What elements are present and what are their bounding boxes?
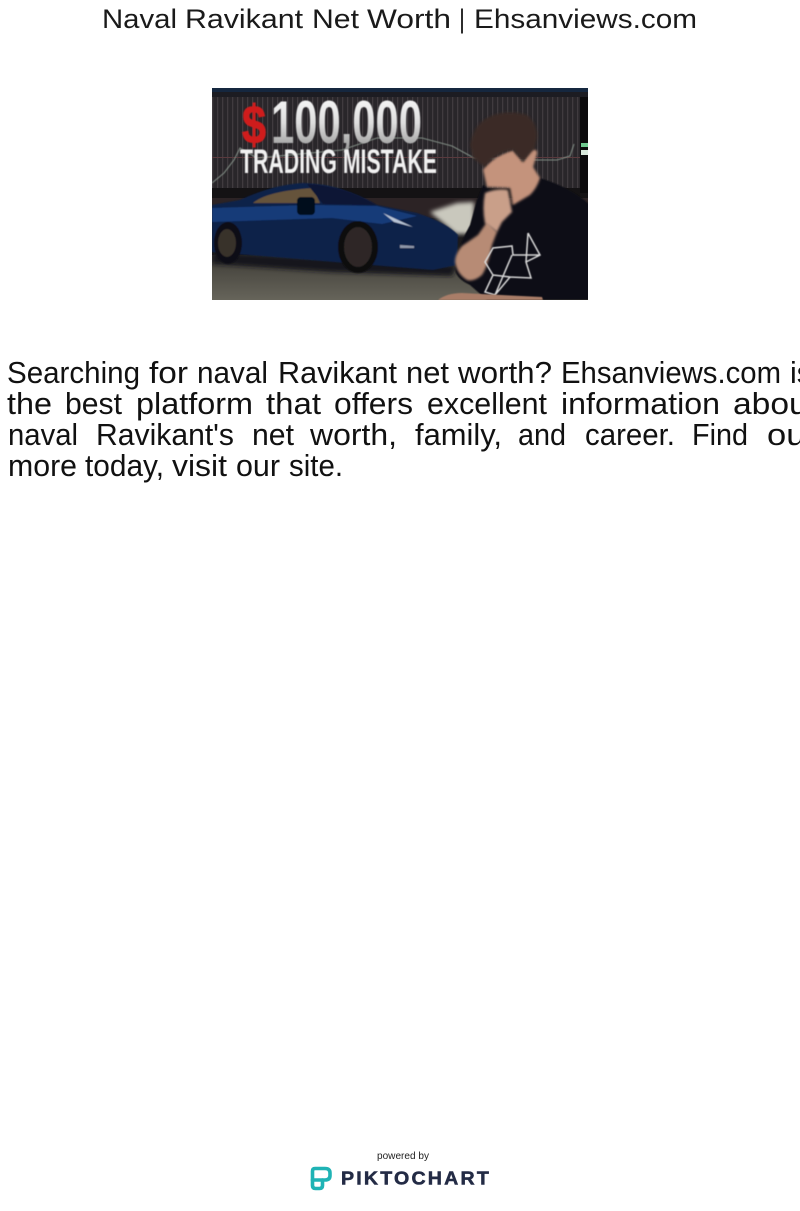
line 2: information [561, 386, 720, 421]
line 2: best [65, 386, 122, 421]
line 3: worth, [309, 417, 397, 452]
line 3: naval [8, 417, 78, 452]
line 1: Ravikant [278, 355, 397, 390]
line 2: offers [334, 386, 413, 421]
fist [484, 189, 512, 232]
line 2: excellent [427, 386, 547, 421]
line 3: Ravikant's [96, 417, 234, 452]
road [212, 255, 588, 300]
wordmark: PIKTOCHART [341, 1168, 491, 1188]
line 4: visit [172, 448, 227, 483]
title [102, 4, 697, 34]
neck and face [483, 150, 540, 205]
line 3: family, [415, 417, 502, 452]
line 4: site. [289, 448, 343, 483]
line 1: worth? [457, 355, 552, 390]
forearm [455, 222, 497, 280]
hair [470, 112, 537, 167]
lower hand [438, 293, 543, 300]
photo: trading mistake thumbnail [212, 88, 590, 300]
title: Ehsanviews.com [474, 4, 697, 34]
title: Net [312, 4, 360, 34]
line 4: more [8, 448, 77, 483]
line 4: our [236, 448, 280, 483]
line 2: the [7, 386, 52, 421]
line 4: today, [85, 448, 164, 483]
powered by label: powered by [377, 1151, 429, 1162]
icon: piktochart logo [312, 1168, 330, 1188]
car [212, 183, 458, 273]
person [438, 112, 590, 300]
title: Worth [367, 4, 451, 34]
subtitle: TRADING MISTAKE [240, 143, 437, 181]
line 3: career. [585, 417, 675, 452]
line 1: Searching [7, 355, 140, 390]
shadow under car [212, 252, 457, 276]
line 1: net [406, 355, 449, 390]
line 1: Ehsanviews.com [561, 355, 781, 390]
dollar sign: $ [242, 95, 266, 155]
footer: powered by piktochart [312, 1151, 491, 1188]
line 2: that [266, 386, 321, 421]
white car blurred [430, 202, 474, 234]
line 3: Find [692, 417, 748, 452]
line 1: for [149, 355, 188, 390]
line 1: naval [197, 355, 268, 390]
bull logo [485, 233, 540, 295]
line 2: platform [136, 386, 253, 421]
title: Ravikant [185, 4, 304, 34]
chart backdrop [212, 88, 588, 218]
body paragraph [7, 355, 800, 483]
shirt [455, 178, 590, 300]
line 3: and [518, 417, 566, 452]
amount: 100,000 [271, 89, 422, 156]
line 3: net [252, 417, 294, 452]
title: | [459, 4, 465, 34]
title: Naval [102, 4, 177, 34]
